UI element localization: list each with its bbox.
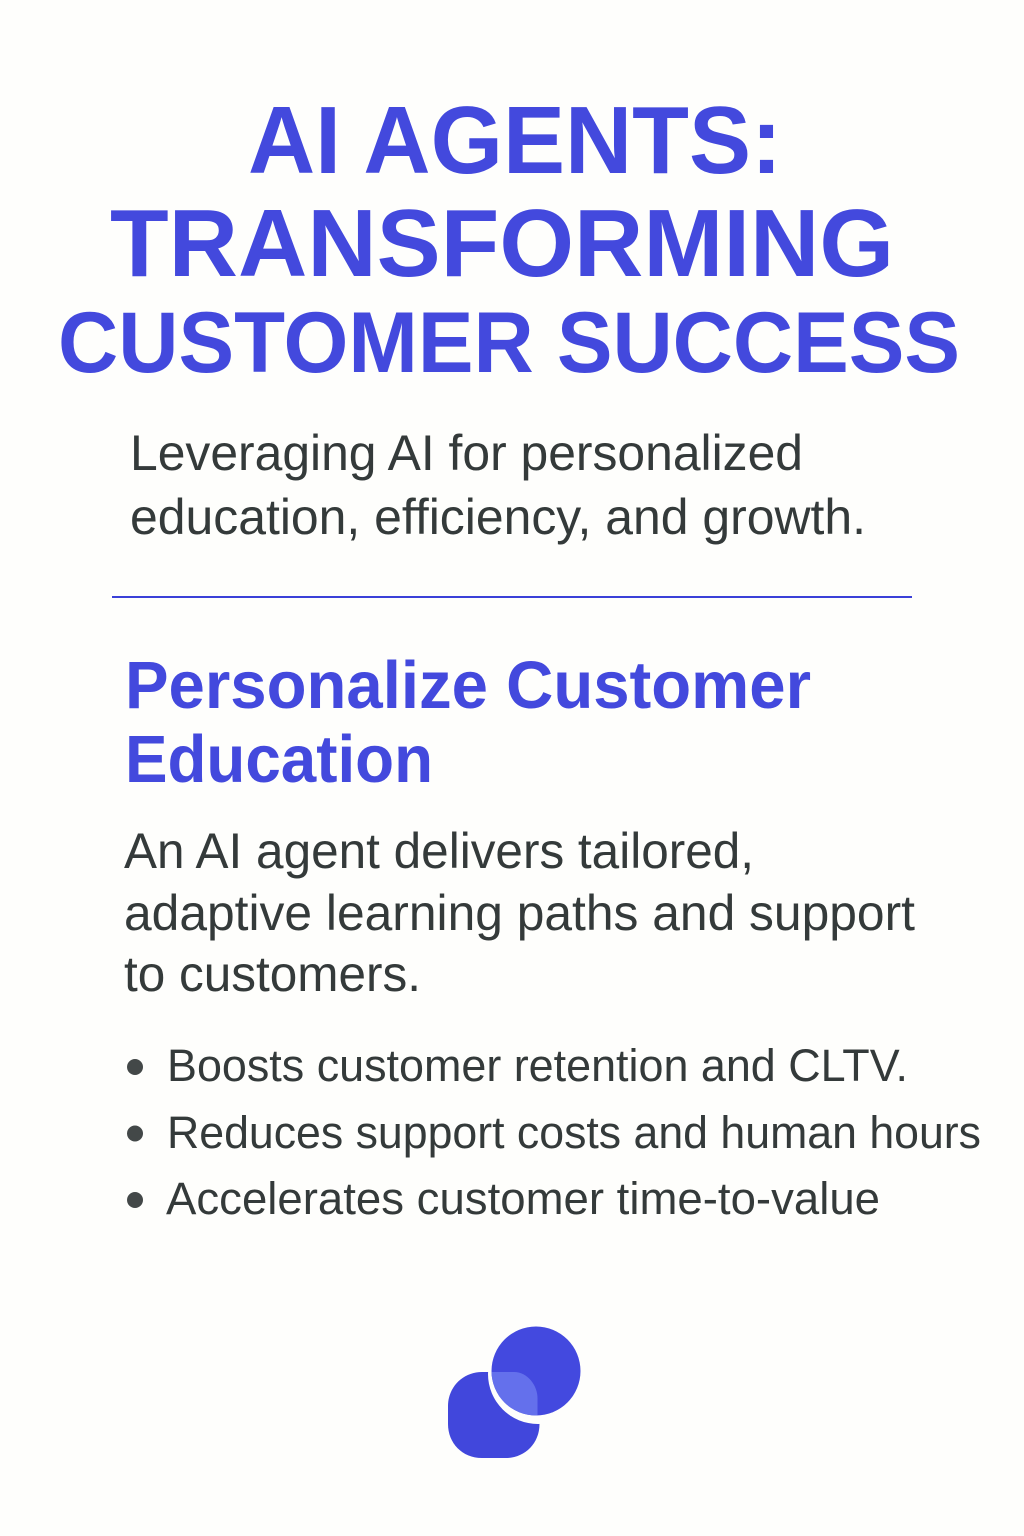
body text: adaptive learning paths and support: [124, 885, 915, 941]
bullet list: [127, 1040, 981, 1224]
title: [58, 87, 960, 391]
title: TRANSFORMING: [110, 190, 894, 297]
subtitle: [130, 425, 866, 545]
title: CUSTOMER SUCCESS: [58, 295, 960, 391]
section heading: Education: [125, 722, 433, 797]
subtitle: education, efficiency, and growth.: [130, 489, 866, 545]
bullet: time-to-value: Accelerates customer time-to-value: [166, 1173, 880, 1224]
icon: overlapping logo: [448, 1320, 588, 1458]
title: AI AGENTS:: [248, 87, 782, 194]
infographic canvas: [61, 106, 980, 1458]
body text: to customers.: [124, 946, 421, 1002]
section heading: [125, 648, 811, 797]
bullet: support costs: Reduces support costs and human hours: [167, 1107, 981, 1158]
body text: An AI agent delivers tailored,: [124, 823, 754, 879]
subtitle: Leveraging AI for personalized: [130, 425, 803, 481]
section heading: Personalize Customer: [125, 648, 811, 723]
body text: [124, 823, 915, 1002]
bullet: retention: Boosts customer retention and CLTV.: [167, 1040, 908, 1091]
